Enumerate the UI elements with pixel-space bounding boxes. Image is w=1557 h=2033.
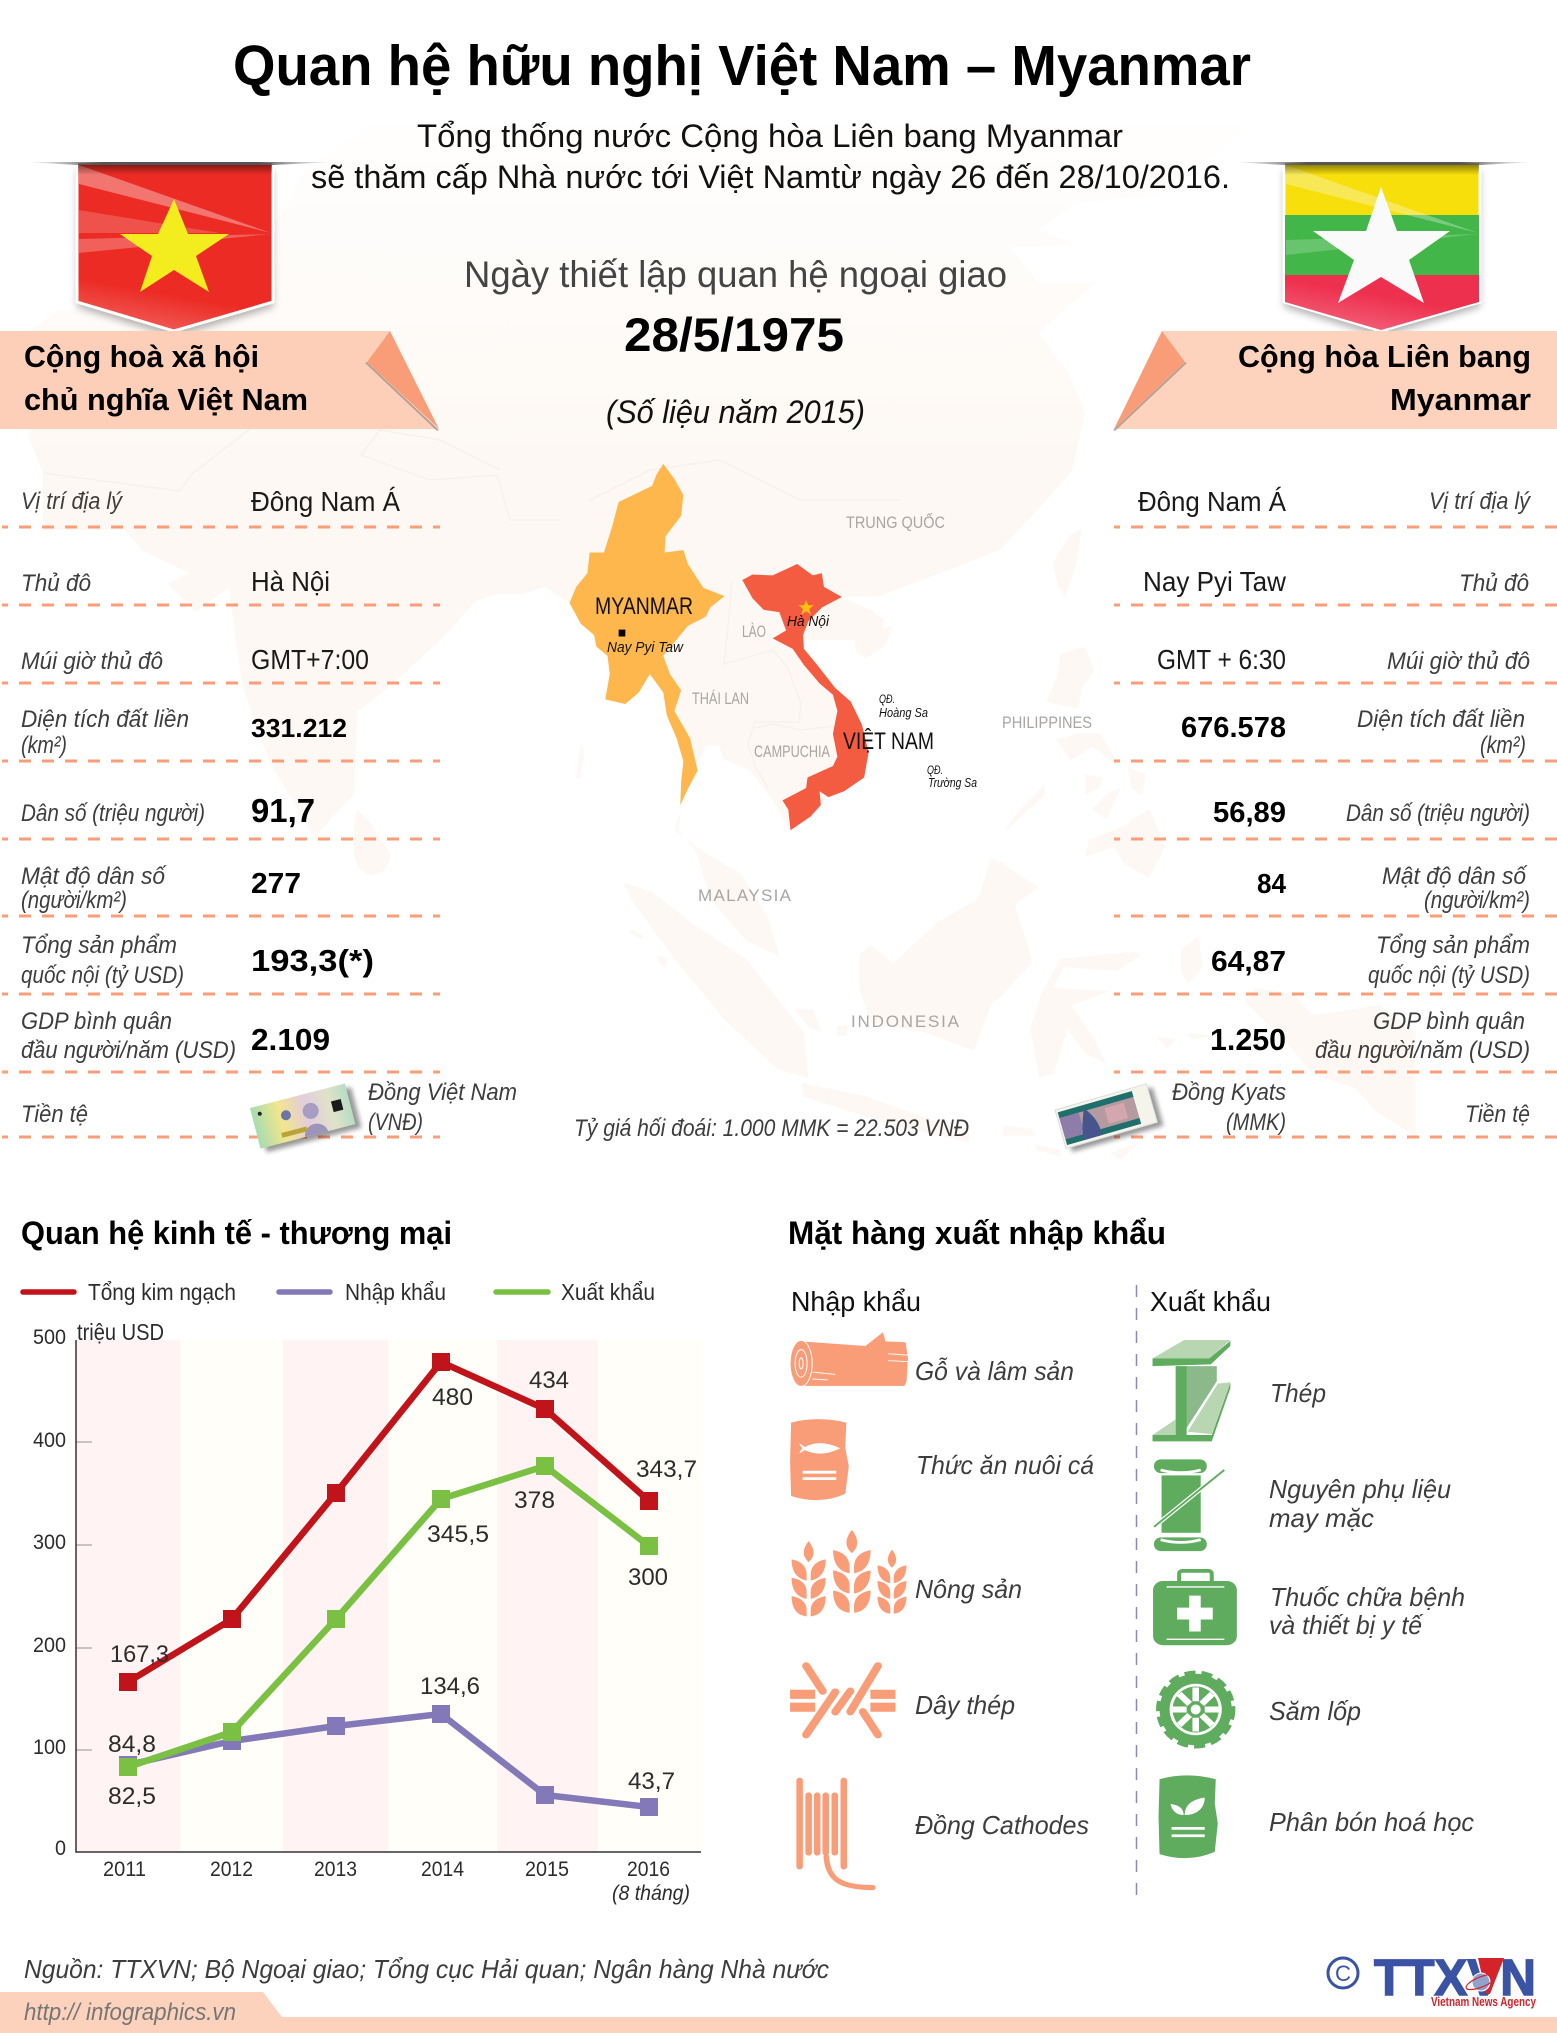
row: time zone [1157, 644, 1530, 675]
label: và thiết bị y tế [1269, 1610, 1423, 1640]
y axis labels [33, 1319, 164, 1860]
row: GDP: 64,87 [1211, 946, 1286, 978]
row: population density: Mật độ dân số [21, 863, 167, 890]
data labels: 134,6 [420, 1673, 480, 1700]
row: population density [21, 863, 301, 914]
heading: date of diplomatic relations: (Số liệu năm 2015) [606, 394, 865, 430]
row: land area [1181, 706, 1526, 759]
map shape: Viet Nam [742, 564, 869, 830]
row: time zone: GMT + 6:30 [1157, 644, 1286, 675]
label: may mặc [1269, 1503, 1374, 1533]
logo: TTXVN: C [1335, 1961, 1351, 1986]
row: GDP per capita: đầu người/năm (USD) [21, 1037, 236, 1064]
row: population density: 277 [251, 868, 301, 900]
data labels: 434 [529, 1367, 569, 1394]
series: imports [119, 1705, 658, 1816]
row: currency: Tiền tệ [21, 1101, 88, 1128]
data labels: 167,3 [110, 1641, 169, 1668]
y axis labels: triệu USD [77, 1319, 164, 1345]
icon: copper cathode coil [800, 1781, 873, 1888]
row: capital: Nay Pyi Taw [1143, 566, 1287, 597]
subtitle: sẽ thăm cấp Nhà nước tới Việt Namtừ ngày 26 đến 28/10/2016. [311, 159, 1230, 195]
row: currency: (VNĐ) [368, 1109, 423, 1136]
data labels: 343,7 [636, 1456, 697, 1483]
x axis labels: 2013 [314, 1858, 357, 1881]
series: total turnover [119, 1353, 658, 1691]
label: Nguyên phụ liệu [1269, 1474, 1451, 1504]
row: geographic location [21, 486, 400, 517]
row: population density: (người/km²) [21, 887, 127, 914]
data labels: 378 [514, 1487, 555, 1514]
x axis labels: 2015 [525, 1858, 569, 1881]
label: Đồng Cathodes [915, 1810, 1089, 1840]
map labels: PHILIPPINES [1002, 713, 1092, 732]
row: capital [1143, 566, 1529, 597]
line chart: trade turnover 2011-2016 [33, 1319, 701, 1905]
label: Phân bón hoá học [1269, 1807, 1474, 1837]
label: Thức ăn nuôi cá [916, 1450, 1094, 1480]
x axis labels: 2012 [210, 1858, 253, 1881]
ribbon: Viet Nam [0, 331, 439, 431]
row: land area: Diện tích đất liền [21, 706, 189, 733]
row: GDP per capita [1210, 1008, 1530, 1064]
row: GDP per capita: 2.109 [251, 1022, 330, 1057]
map labels: Nay Pyi Taw [607, 639, 684, 656]
logo: TTXVN: TTXVN [1374, 1949, 1536, 2006]
source note: Nguồn: TTXVN; Bộ Ngoại giao; Tổng cục Hải quan; Ngân hàng Nhà nước [24, 1954, 829, 1984]
x axis labels: 2014 [421, 1858, 464, 1881]
footer band: http:// infographics.vn [24, 1999, 236, 2026]
map labels: MYANMAR [595, 593, 693, 620]
panel: export goods [1153, 1340, 1474, 1858]
data labels: 43,7 [628, 1768, 675, 1795]
label [1269, 1474, 1451, 1533]
heading: date of diplomatic relations: Ngày thiết lập quan hệ ngoại giao [464, 254, 1007, 295]
map labels: THÁI LAN [692, 689, 749, 708]
chart legend: Xuất khẩu [561, 1279, 655, 1305]
icon: yellow star [120, 199, 229, 292]
map labels: QĐ. [879, 692, 895, 706]
flag banner: Myanmar [1232, 162, 1535, 337]
heading: date of diplomatic relations [464, 254, 1007, 430]
row: land area: 676.578 [1181, 712, 1286, 744]
title: Quan hệ hữu nghị Việt Nam – Myanmar [233, 34, 1251, 98]
panel: import goods [790, 1332, 1094, 1888]
row: capital: Thủ đô [1459, 570, 1529, 597]
chart legend: Nhập khẩu [345, 1279, 446, 1305]
map labels: LÀO [742, 622, 766, 641]
map labels: INDONESIA [851, 1012, 960, 1031]
column heading: imports: Nhập khẩu [791, 1286, 921, 1317]
row: population density: 84 [1257, 868, 1286, 899]
map labels: Trường Sa [928, 775, 977, 790]
row: GDP: 193,3(*) [251, 943, 374, 978]
icon: Nay Pyi Taw marker [619, 630, 625, 636]
row: population density: Mật độ dân số [1382, 863, 1528, 890]
y axis labels: 100 [33, 1736, 66, 1759]
row: population: 91,7 [251, 792, 315, 829]
data labels: 82,5 [108, 1783, 156, 1810]
row: currency: Tiền tệ [1465, 1101, 1530, 1128]
map shape: Myanmar [570, 464, 724, 805]
y axis labels: 300 [33, 1531, 66, 1554]
icon: barbed wire [790, 1666, 896, 1735]
heading: date of diplomatic relations: 28/5/1975 [624, 308, 844, 361]
footer band [0, 1992, 1557, 2033]
data labels [108, 1367, 697, 1810]
icon: tyre [1159, 1673, 1233, 1746]
row: time zone: Múi giờ thủ đô [21, 648, 163, 675]
map labels: Hoàng Sa [879, 705, 928, 720]
row: GDP per capita: đầu người/năm (USD) [1315, 1037, 1530, 1064]
map labels [595, 512, 1092, 1031]
icon: Myanmar banknote [1055, 1082, 1164, 1153]
row: capital: Thủ đô [21, 570, 91, 597]
row: capital: Hà Nội [251, 566, 330, 597]
ribbon: Myanmar [1113, 331, 1557, 431]
background map of Asia [25, 125, 1415, 1160]
row: geographic location: Đông Nam Á [251, 486, 400, 517]
row: land area: Diện tích đất liền [1357, 706, 1525, 733]
icon: timber log [790, 1332, 908, 1386]
icon: first aid kit [1153, 1571, 1237, 1645]
ribbon: Viet Nam: Cộng hoà xã hội [24, 339, 259, 374]
row: population density: (người/km²) [1424, 887, 1530, 914]
subtitle: Tổng thống nước Cộng hòa Liên bang Myanmar [417, 118, 1123, 154]
map labels: CAMPUCHIA [754, 742, 830, 761]
row: GDP [1211, 932, 1530, 989]
icon: thread spool and needle [1154, 1459, 1224, 1551]
row: population: Dân số (triệu người) [1346, 800, 1530, 827]
ribbon: Myanmar: Cộng hòa Liên bang [1238, 339, 1531, 374]
row: currency: Đồng Kyats [1172, 1079, 1286, 1106]
icon: fish feed sack [790, 1419, 849, 1500]
label [1269, 1582, 1465, 1640]
row: population density [1257, 863, 1530, 914]
chart legend: Tổng kim ngạch [88, 1279, 236, 1305]
row: land area: (km²) [21, 732, 67, 759]
label: Gỗ và lâm sản [915, 1356, 1074, 1386]
icon: wheat [792, 1530, 906, 1616]
row: geographic location: Đông Nam Á [1138, 486, 1286, 517]
map labels: Hà Nội [787, 613, 830, 630]
row: GDP: quốc nội (tỷ USD) [21, 962, 184, 989]
row: time zone: GMT+7:00 [251, 644, 369, 675]
row: capital [21, 566, 330, 597]
icon: Hanoi star [799, 600, 814, 615]
x axis labels [103, 1858, 690, 1905]
icon: white star [1313, 187, 1450, 303]
map labels: VIỆT NAM [843, 728, 934, 755]
row: time zone [21, 644, 369, 675]
row: GDP [21, 932, 374, 989]
row: population [21, 792, 315, 829]
y axis labels: 500 [33, 1326, 66, 1349]
exchange rate note: Tỷ giá hối đoái: 1.000 MMK = 22.503 VNĐ [574, 1115, 969, 1142]
heading: economic and trade relations: Quan hệ kinh tế - thương mại [21, 1215, 452, 1251]
row: time zone: Múi giờ thủ đô [1387, 648, 1530, 675]
map: Myanmar and Viet Nam highlighted with labels [570, 464, 869, 830]
label: Nông sản [915, 1574, 1022, 1604]
y axis labels: 400 [33, 1429, 66, 1452]
heading: import-export goods: Mặt hàng xuất nhập khẩu [788, 1215, 1166, 1251]
y axis labels: 200 [33, 1634, 66, 1657]
row: currency: Đồng Việt Nam [368, 1079, 517, 1106]
label: Dây thép [915, 1690, 1015, 1720]
subtitle [311, 118, 1230, 195]
icon: steel beam [1153, 1340, 1230, 1441]
row: currency: (MMK) [1226, 1109, 1286, 1136]
row: population: 56,89 [1213, 797, 1286, 829]
row: land area: 331.212 [251, 713, 347, 743]
row: geographic location: Vị trí địa lý [1429, 488, 1532, 515]
x axis labels: 2016 [627, 1858, 670, 1881]
data labels: 84,8 [108, 1731, 156, 1758]
dashed row dividers [2, 527, 1557, 1137]
panel: Myanmar statistics [1138, 486, 1532, 1136]
row: land area [21, 706, 347, 759]
x axis labels: 2011 [103, 1858, 146, 1881]
label: Thuốc chữa bệnh [1270, 1582, 1465, 1612]
row: GDP: Tổng sản phẩm [1376, 932, 1530, 959]
ribbon: Viet Nam: chủ nghĩa Việt Nam [24, 382, 308, 417]
label: Săm lốp [1269, 1696, 1361, 1726]
icon: Vietnamese banknote [250, 1082, 361, 1154]
chart legend [23, 1279, 655, 1305]
data labels: 300 [628, 1564, 668, 1591]
row: GDP per capita [21, 1008, 330, 1064]
data labels: 345,5 [427, 1521, 489, 1548]
series: exports [119, 1457, 658, 1776]
panel: Viet Nam statistics [21, 486, 517, 1136]
icon: fertiliser sack [1159, 1775, 1218, 1858]
row: currency [21, 1079, 517, 1136]
row: geographic location [1138, 486, 1532, 517]
map labels: MALAYSIA [698, 886, 792, 905]
x axis labels: (8 tháng) [612, 1882, 690, 1905]
map labels: TRUNG QUỐC [846, 512, 945, 532]
label: Thép [1270, 1378, 1326, 1408]
map labels: QĐ. [927, 763, 943, 777]
flag banner: Viet Nam [25, 162, 335, 337]
ribbon: Myanmar: Myanmar [1390, 382, 1531, 417]
row: population: Dân số (triệu người) [21, 800, 205, 827]
y axis labels: 0 [55, 1837, 66, 1860]
row: GDP: quốc nội (tỷ USD) [1368, 962, 1530, 989]
row: GDP: Tổng sản phẩm [21, 932, 177, 959]
row: population [1213, 797, 1530, 829]
column heading: exports: Xuất khẩu [1150, 1286, 1271, 1317]
row: currency [1172, 1079, 1530, 1136]
data labels: 480 [432, 1384, 473, 1411]
row: land area: (km²) [1480, 732, 1526, 759]
row: GDP per capita: GDP bình quân [21, 1008, 172, 1035]
row: GDP per capita: 1.250 [1210, 1022, 1286, 1057]
row: geographic location: Vị trí địa lý [21, 488, 124, 515]
row: GDP per capita: GDP bình quân [1373, 1008, 1525, 1035]
